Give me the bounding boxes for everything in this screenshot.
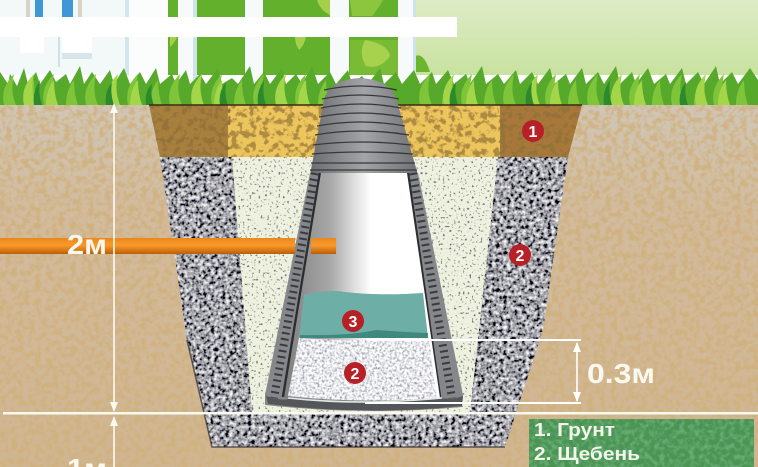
legend xyxy=(529,419,754,467)
baseline xyxy=(3,412,758,414)
windows xyxy=(35,0,43,17)
marker: 3: 3 xyxy=(349,314,358,331)
dimension: 2m: 2м xyxy=(67,229,107,260)
marker: 2 xyxy=(509,244,531,266)
well base ring xyxy=(266,396,463,411)
marker: 2 in well: 2 xyxy=(351,366,360,383)
inner white edge xyxy=(424,294,436,392)
grass xyxy=(0,66,758,105)
marker: 1 xyxy=(522,120,544,142)
water layer xyxy=(299,291,428,338)
marker: 1: 1 xyxy=(529,124,538,141)
dimension: 0.3m xyxy=(365,340,655,403)
marker: 3 xyxy=(342,310,364,332)
well walls xyxy=(265,173,463,411)
legend: 1. Грунт xyxy=(534,420,615,440)
crushed stone layer xyxy=(288,338,437,401)
dimension: 0.3m: 0.3м xyxy=(587,358,655,389)
background: house, fence and garden xyxy=(0,0,758,80)
layer: pale sand backfill xyxy=(232,157,498,412)
dimension: 2m xyxy=(67,103,118,412)
layer: gravel xyxy=(158,150,570,447)
leaves xyxy=(170,0,330,50)
legend: 2. Щебень xyxy=(534,444,640,464)
cone well xyxy=(265,78,463,411)
pit with fill layers xyxy=(140,105,590,460)
layer: topsoil xyxy=(140,105,590,157)
well top: ribbed cap xyxy=(310,78,418,175)
dimension: 1m xyxy=(67,416,118,467)
marker: 2: 2 xyxy=(516,248,525,265)
marker: 2 in well xyxy=(344,362,366,384)
fence xyxy=(178,0,193,80)
well interior xyxy=(284,173,440,398)
ground: sandy soil xyxy=(0,105,758,467)
inlet pipe xyxy=(0,238,336,254)
